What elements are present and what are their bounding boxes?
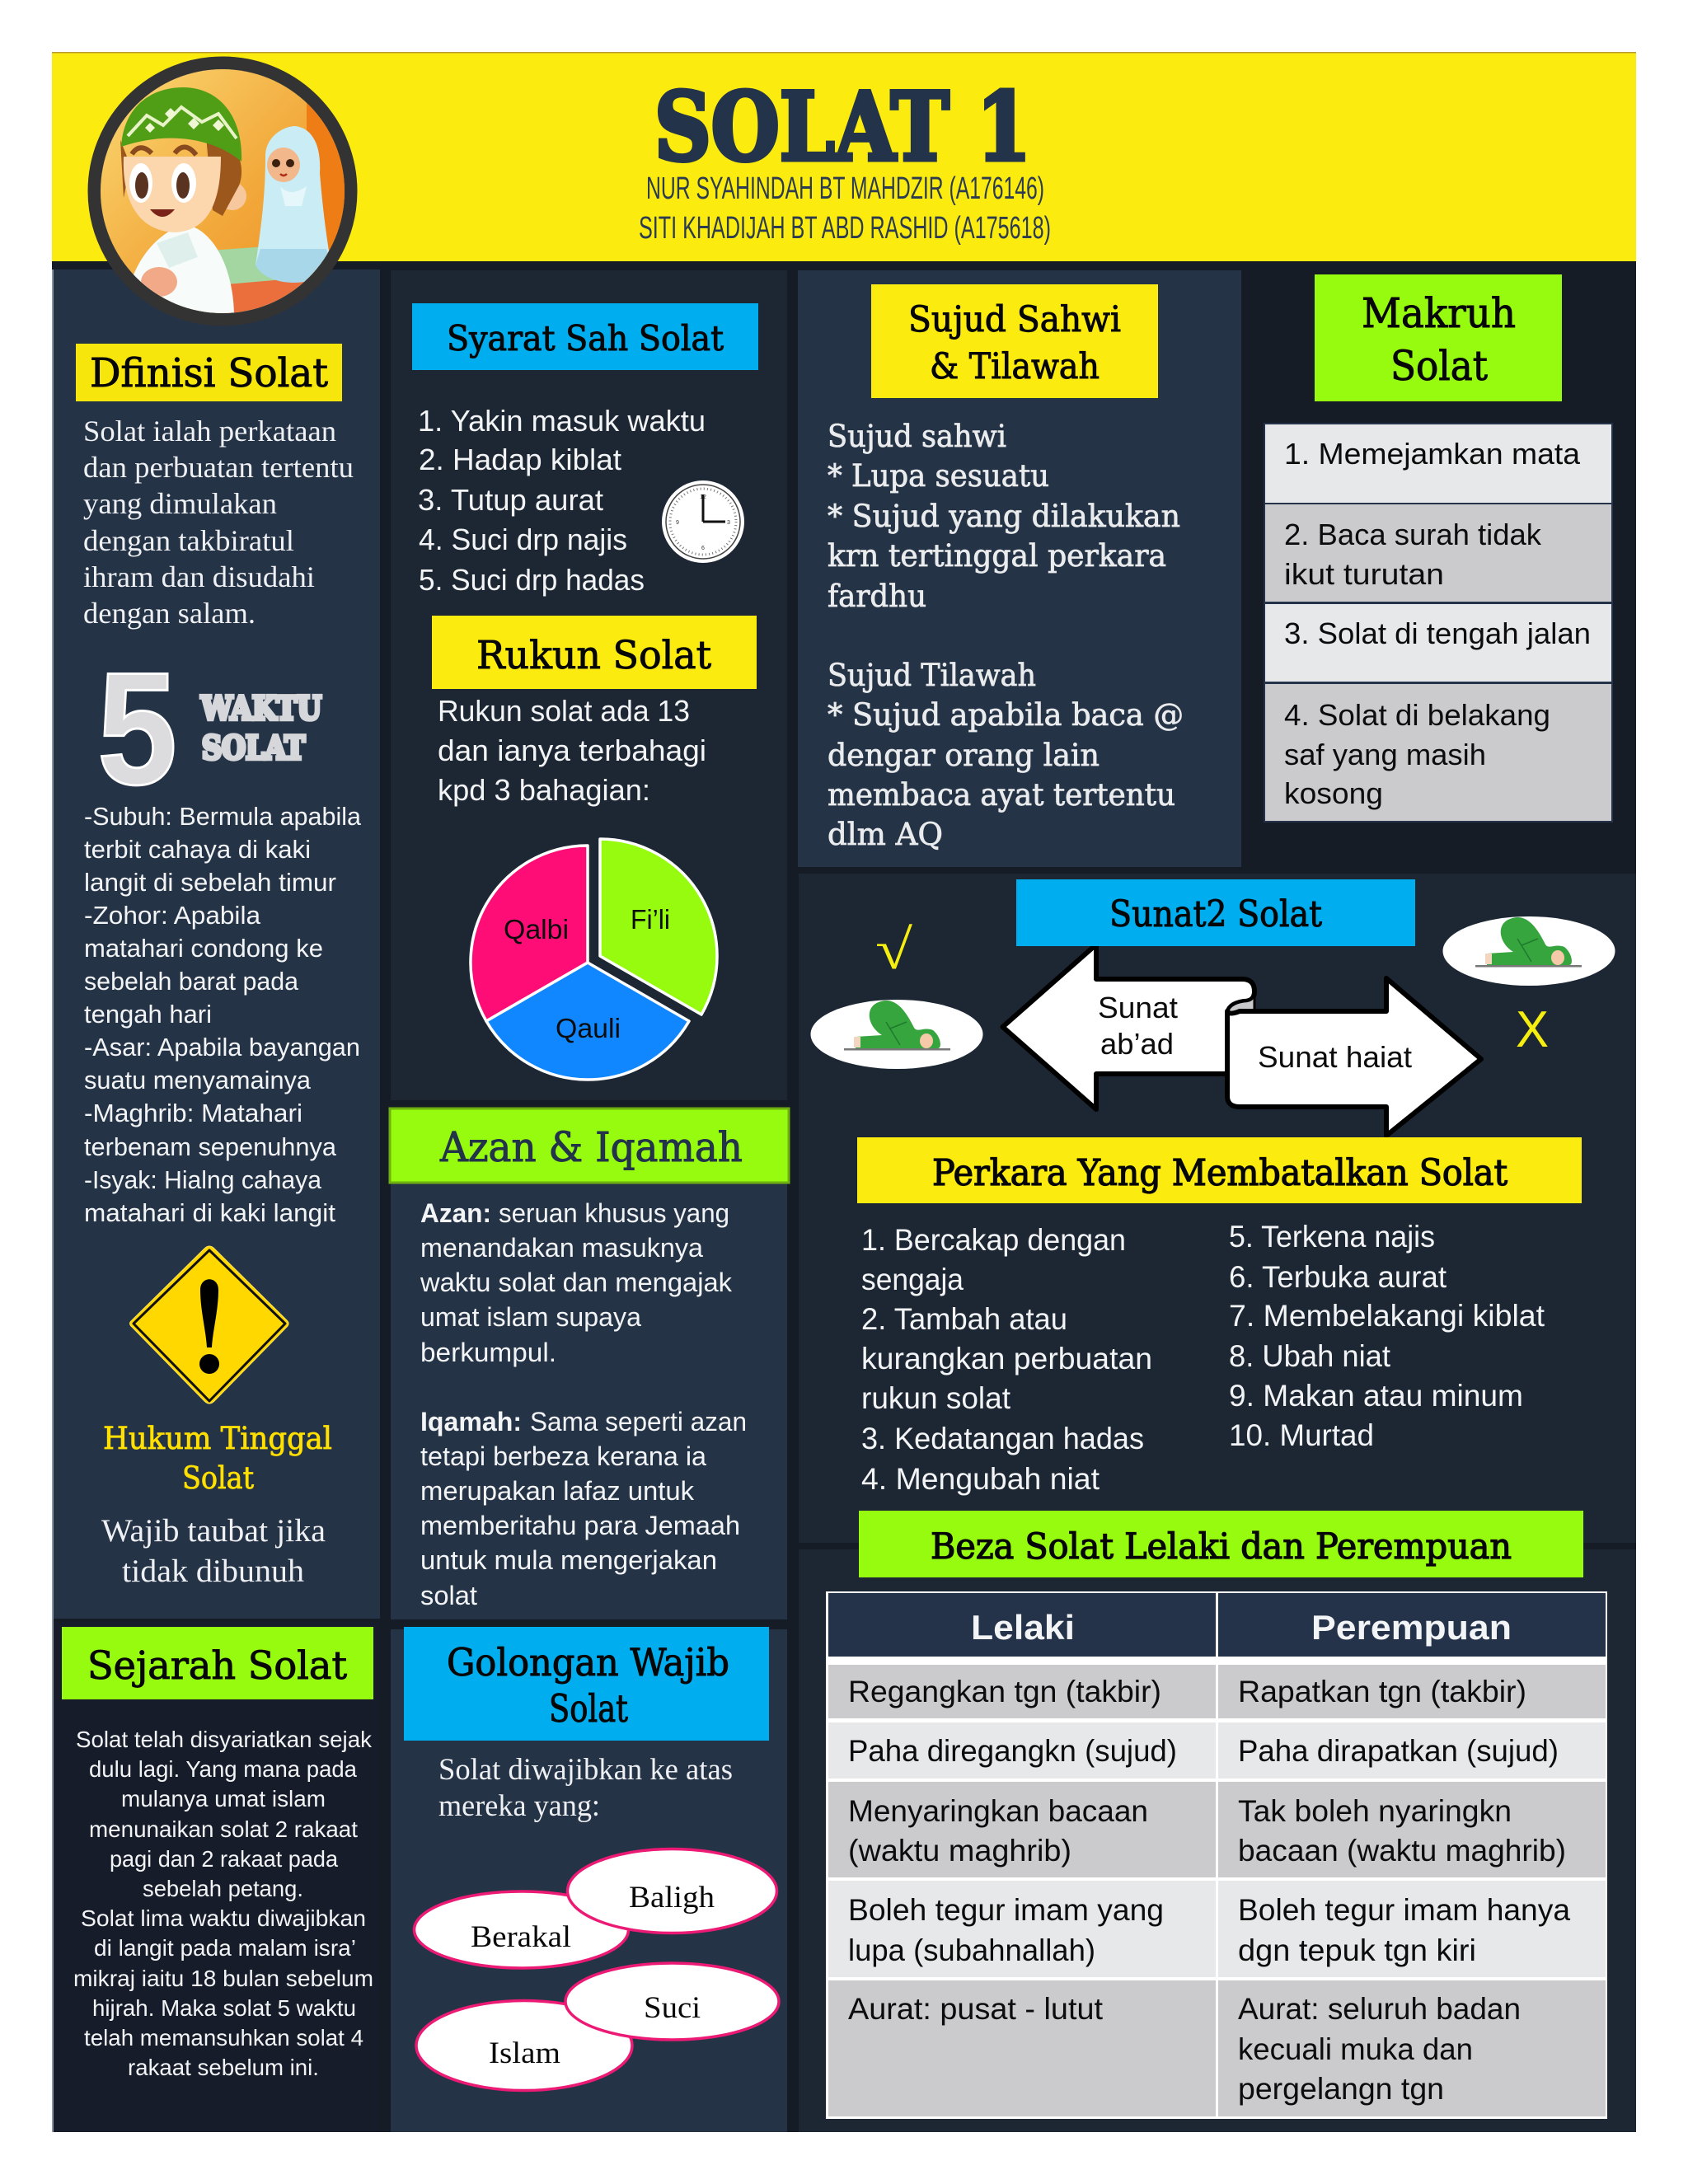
arrow: left: [1002, 944, 1254, 1109]
list: perkara left: 1. Bercakap dengan: [861, 1223, 1126, 1257]
list: perkara right: 7. Membelakangi kiblat: [1229, 1299, 1545, 1333]
list: syarat: 2. Hadap kiblat: [419, 443, 621, 476]
oval: Berakal: [414, 1891, 628, 1968]
heading: Hukum Tinggal Solat: Solat: [182, 1460, 255, 1496]
table header: Perempuan: [1311, 1608, 1512, 1647]
heading: Syarat Sah Solat: [412, 303, 758, 370]
text: rukun: [438, 694, 706, 807]
text: sujud: [828, 419, 1184, 852]
list: perkara left: rukun solat: [861, 1381, 1011, 1415]
text: rukun: kpd 3 bahagian:: [438, 773, 650, 807]
heading: Makruh Solat: Makruh: [1362, 289, 1516, 337]
text: sejarah: pagi dan 2 rakaat pada: [110, 1846, 338, 1872]
pie chart: rukun: [471, 839, 717, 1080]
table column: perempuan: Tak boleh nyaringkn: [1238, 1794, 1512, 1828]
slice: Fi'li: [600, 839, 717, 1015]
list: syarat: 4. Suci drp najis: [419, 523, 627, 556]
text: sejarah: telah memansuhkan solat 4: [84, 2025, 363, 2050]
pie chart: rukun: Qalbi: [504, 914, 569, 944]
text: sujud: dlm AQ: [828, 817, 943, 852]
pie chart: rukun: Qauli: [556, 1013, 621, 1043]
icon: prostrating figure, correct: [811, 1000, 982, 1069]
list: perkara right: 9. Makan atau minum: [1229, 1379, 1523, 1413]
text: azan and iqamah: untuk mula mengerjakan: [420, 1545, 717, 1575]
heading: Dfinisi Solat: Dfinisi Solat: [90, 350, 329, 396]
title banner: [52, 52, 1636, 261]
list: perkara right: 6. Terbuka aurat: [1229, 1260, 1447, 1294]
panel: beza solat: [799, 1549, 1636, 2132]
list: perkara right: 10. Murtad: [1229, 1418, 1374, 1452]
text: azan and iqamah: Sama seperti azan: [530, 1407, 747, 1436]
heading: 5 waktu solat: 5: [97, 640, 177, 818]
arrows: sunat ab'ad and sunat haiat: ab’ad: [1100, 1027, 1174, 1061]
list: perkara left: 3. Kedatangan hadas: [861, 1422, 1144, 1455]
text: sejarah: dulu lagi. Yang mana pada: [89, 1756, 357, 1782]
heading: Beza Solat Lelaki dan Perempuan: Beza Solat Lelaki dan Perempuan: [931, 1526, 1512, 1568]
panel: sujud: [798, 270, 1241, 867]
ovals: golongan conditions: Islam: [489, 2036, 560, 2070]
text: sujud: krn tertinggal perkara: [828, 538, 1166, 574]
text: rukun: dan ianya terbahagi: [438, 733, 706, 767]
text: azan and iqamah: Azan:: [420, 1198, 491, 1228]
heading: Dfinisi Solat: [76, 344, 342, 401]
arrows: sunat ab'ad and sunat haiat: Sunat haiat: [1258, 1040, 1412, 1074]
text: sejarah: di langit pada malam isra’: [94, 1935, 356, 1961]
text: sujud: * Sujud yang dilakukan: [828, 499, 1180, 534]
text: azan and iqamah: tetapi berbeza kerana ia: [420, 1441, 706, 1471]
oval: Suci: [565, 1963, 779, 2040]
pie chart: rukun: Fi’li: [631, 904, 670, 935]
heading: Syarat Sah Solat: Syarat Sah Solat: [447, 318, 724, 359]
text: azan and iqamah: umat islam supaya: [420, 1302, 641, 1332]
table header: [971, 1608, 1512, 1647]
text: definition: Solat ialah perkataan: [83, 415, 336, 448]
list: perkara left: sengaja: [861, 1263, 964, 1296]
heading: Hukum Tinggal Solat: Hukum Tinggal: [103, 1421, 332, 1456]
text: sujud: fardhu: [828, 579, 926, 614]
boy face: [124, 157, 221, 232]
list: syarat: 5. Suci drp hadas: [419, 563, 645, 597]
table: makruh: saf yang masih: [1284, 738, 1486, 771]
text: definition: yang dimulakan: [83, 487, 277, 520]
text: prayer times: langit di sebelah timur: [84, 868, 336, 897]
arrows: sunat ab'ad and sunat haiat: [1002, 944, 1481, 1136]
text: azan and iqamah: Iqamah:: [420, 1407, 522, 1436]
boy body: [134, 227, 234, 313]
table column: perempuan: kecuali muka dan: [1238, 2032, 1473, 2066]
table: makruh: 2. Baca surah tidak: [1284, 518, 1542, 551]
text: definition: [83, 415, 354, 630]
oval: Islam: [416, 2001, 632, 2090]
text: golongan: [438, 1753, 733, 1823]
text: sejarah: sebelah petang.: [143, 1876, 303, 1901]
text: sejarah: mulanya umat islam: [121, 1786, 326, 1811]
boy cap: [121, 87, 241, 162]
table column: perempuan: Rapatkan tgn (takbir): [1238, 1675, 1526, 1708]
arrow: right: [1227, 978, 1481, 1136]
table: makruh: 1. Memejamkan mata: [1284, 437, 1581, 471]
list: perkara left: 2. Tambah atau: [861, 1302, 1067, 1336]
icon: warning sign: [130, 1246, 288, 1404]
heading: Sujud Sahwi & Tilawah: [871, 284, 1158, 398]
text: golongan: Solat diwajibkan ke atas: [438, 1753, 733, 1787]
text: golongan: mereka yang:: [438, 1789, 600, 1823]
slice: Qauli: [486, 963, 689, 1080]
girl: [256, 126, 331, 265]
text: sejarah: Solat telah disyariatkan sejak: [76, 1727, 373, 1752]
text: azan and iqamah: solat: [420, 1581, 477, 1610]
text: sejarah: rakaat sebelum ini.: [128, 2055, 319, 2080]
heading: Azan & Iqamah: Azan & Iqamah: [439, 1123, 743, 1171]
heading: Beza Solat Lelaki dan Perempuan: [859, 1511, 1583, 1577]
table column: lelaki: Paha diregangkn (sujud): [848, 1734, 1177, 1768]
list: perkara right: [1229, 1220, 1545, 1452]
list: perkara right: 5. Terkena najis: [1229, 1220, 1435, 1254]
text: sujud: membaca ayat tertentu: [828, 777, 1175, 813]
text: azan and iqamah: menandakan masuknya: [420, 1233, 703, 1263]
heading: Hukum Tinggal Solat: [103, 1421, 332, 1496]
text: prayer times: [84, 802, 362, 1227]
table column: lelaki: Aurat: pusat - lutut: [848, 1992, 1104, 2026]
list: syarat: 3. Tutup aurat: [418, 483, 603, 517]
text: definition: ihram dan disudahi: [83, 560, 315, 593]
table column: lelaki: (waktu maghrib): [848, 1834, 1071, 1868]
text: sujud: Sujud Tilawah: [828, 658, 1036, 693]
text: prayer times: -Zohor: Apabila: [84, 901, 261, 930]
icon: clock: 3: [727, 520, 730, 526]
icon: clock: 6: [701, 546, 705, 551]
list: perkara left: 4. Mengubah niat: [861, 1462, 1100, 1496]
text: definition: dengan salam.: [83, 597, 256, 630]
heading: 5 waktu solat: [97, 640, 321, 818]
table column: perempuan: bacaan (waktu maghrib): [1238, 1834, 1566, 1868]
text: prayer times: -Asar: Apabila bayangan: [84, 1033, 360, 1062]
heading: Sujud Sahwi & Tilawah: & Tilawah: [930, 346, 1100, 387]
heading: Rukun Solat: [432, 616, 757, 689]
oval: Baligh: [567, 1849, 776, 1933]
heading: Golongan Wajib Solat: Golongan Wajib: [447, 1640, 729, 1685]
text: azan and iqamah: waktu solat dan mengajak: [420, 1268, 733, 1297]
heading: Golongan Wajib Solat: [404, 1627, 769, 1741]
icon: cross mark: X: [1516, 1001, 1549, 1058]
text: prayer times: tengah hari: [84, 1000, 212, 1029]
table column: perempuan: Boleh tegur imam hanya: [1238, 1893, 1570, 1927]
list: perkara left: kurangkan perbuatan: [861, 1342, 1152, 1376]
authors: [639, 171, 1051, 246]
icon: avatar of boy and girl: [91, 58, 356, 330]
list: syarat: 1. Yakin masuk waktu: [418, 404, 706, 438]
text: sejarah: hijrah. Maka solat 5 waktu: [92, 1995, 356, 2021]
icon: prostrating figure, incorrect: [1442, 916, 1615, 986]
text: azan and iqamah: seruan khusus yang: [499, 1198, 729, 1228]
heading: Sunat2 Solat: Sunat2 Solat: [1109, 893, 1322, 935]
authors: SITI KHADIJAH BT ABD RASHID (A175618): [639, 211, 1051, 246]
text: prayer times: suatu menyamainya: [84, 1066, 312, 1094]
heading: 5 waktu solat: WAKTU: [200, 690, 321, 728]
boy ears and hair: [226, 184, 246, 210]
heading: Makruh Solat: [1315, 274, 1562, 401]
ovals: golongan conditions: Berakal: [471, 1920, 571, 1954]
list: syarat: [418, 404, 706, 597]
text: prayer times: sebelah barat pada: [84, 967, 299, 996]
table column: lelaki: [848, 1675, 1177, 2026]
table: makruh: 4. Solat di belakang: [1284, 698, 1550, 732]
text: sujud: Sujud sahwi: [828, 419, 1006, 454]
text: sejarah: menunaikan solat 2 rakaat: [89, 1816, 358, 1842]
ovals: golongan conditions: Baligh: [629, 1881, 715, 1915]
table column: perempuan: Aurat: seluruh badan: [1238, 1992, 1521, 2026]
table column: lelaki: lupa (subahnallah): [848, 1933, 1095, 1967]
heading: Golongan Wajib Solat: Solat: [549, 1686, 628, 1731]
table: makruh: 3. Solat di tengah jalan: [1284, 616, 1591, 650]
panel: definition and prayer times: [52, 269, 380, 2132]
text: prayer times: matahari condong ke: [84, 934, 323, 963]
text: prayer times: -Isyak: Hialng cahaya: [84, 1165, 322, 1194]
heading: Perkara Yang Membatalkan Solat: [857, 1137, 1582, 1203]
table column: lelaki: Menyaringkan bacaan: [848, 1794, 1148, 1828]
text: azan and iqamah: berkumpul.: [420, 1338, 556, 1367]
table column: perempuan: [1238, 1675, 1570, 2106]
text: definition: dan perbuatan tertentu: [83, 451, 354, 484]
slice: Qalbi: [471, 846, 588, 1021]
text: azan and iqamah: [420, 1198, 747, 1610]
icon: clock: 9: [676, 520, 679, 526]
text: hukum: tidak dibunuh: [122, 1554, 304, 1589]
text: prayer times: terbit cahaya di kaki: [84, 835, 311, 864]
text: rukun: Rukun solat ada 13: [438, 694, 690, 728]
panel: golongan wajib: [391, 1629, 787, 2132]
title: SOLAT 1: [654, 72, 1031, 182]
ovals: golongan conditions: Suci: [644, 1991, 701, 2025]
text: sejarah: Solat lima waktu diwajibkan: [81, 1905, 366, 1931]
icon: check mark: √: [875, 918, 913, 981]
text: azan and iqamah: merupakan lafaz untuk: [420, 1476, 695, 1506]
table column: perempuan: dgn tepuk tgn kiri: [1238, 1933, 1476, 1967]
text: sujud: dengar orang lain: [828, 738, 1100, 773]
text: sujud: * Lupa sesuatu: [828, 458, 1049, 494]
panel: syarat and rukun: [391, 270, 787, 1100]
arrows: sunat ab'ad and sunat haiat: Sunat: [1098, 991, 1178, 1024]
table header: Lelaki: [971, 1608, 1075, 1647]
table column: perempuan: pergelangn tgn: [1238, 2072, 1444, 2106]
table: makruh: kosong: [1284, 776, 1383, 810]
text: prayer times: terbenam sepenuhnya: [84, 1132, 337, 1161]
heading: Perkara Yang Membatalkan Solat: Perkara Yang Membatalkan Solat: [932, 1152, 1507, 1194]
heading: Sejarah Solat: Sejarah Solat: [87, 1643, 347, 1689]
ovals: golongan conditions: [414, 1849, 779, 2090]
text: hukum: [101, 1513, 326, 1589]
table: beza lelaki perempuan: [826, 1591, 1607, 2119]
heading: Sejarah Solat: [62, 1627, 373, 1699]
heading: Azan & Iqamah: [390, 1108, 789, 1183]
text: sujud: * Sujud apabila baca @: [828, 697, 1184, 733]
table: makruh: ikut turutan: [1284, 557, 1444, 591]
icon: clock: [662, 480, 744, 563]
table column: lelaki: Regangkan tgn (takbir): [848, 1675, 1161, 1708]
heading: Sujud Sahwi & Tilawah: Sujud Sahwi: [908, 299, 1121, 340]
heading: Makruh Solat: Solat: [1390, 342, 1488, 390]
table column: perempuan: Paha dirapatkan (sujud): [1238, 1734, 1559, 1768]
heading: Sunat2 Solat: [1016, 879, 1415, 946]
table: makruh: [1264, 423, 1613, 823]
text: prayer times: matahari di kaki langit: [84, 1198, 335, 1227]
heading: 5 waktu solat: SOLAT: [202, 729, 305, 767]
list: perkara left: [861, 1223, 1152, 1496]
heading: Rukun Solat: Rukun Solat: [476, 633, 711, 678]
text: sejarah: mikraj iaitu 18 bulan sebelum: [73, 1966, 373, 1991]
text: prayer times: -Maghrib: Matahari: [84, 1099, 302, 1127]
authors: NUR SYAHINDAH BT MAHDZIR (A176146): [646, 171, 1044, 206]
list: perkara right: 8. Ubah niat: [1229, 1339, 1391, 1373]
text: prayer times: -Subuh: Bermula apabila: [84, 802, 362, 831]
text: definition: dengan takbiratul: [83, 524, 294, 557]
icon: clock: 12: [700, 494, 706, 500]
panel: sunat and perkara: [799, 874, 1636, 1543]
text: azan and iqamah: memberitahu para Jemaah: [420, 1511, 740, 1540]
text: sejarah: [73, 1727, 373, 2080]
panel: azan body: [391, 1183, 787, 1619]
text: hukum: Wajib taubat jika: [101, 1513, 326, 1549]
table column: lelaki: Boleh tegur imam yang: [848, 1893, 1164, 1927]
